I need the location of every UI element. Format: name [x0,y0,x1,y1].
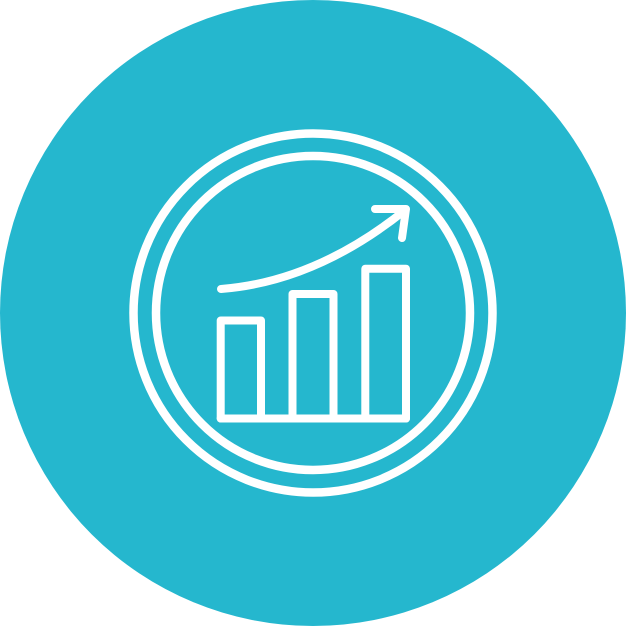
bar 3 [365,269,406,418]
bar 1 [221,320,261,418]
bar 2 [292,294,334,418]
bar chart [221,269,406,418]
outer ring [134,134,492,492]
arrow: upward trend [221,209,406,289]
baseline [221,414,406,422]
inner ring [156,156,470,470]
